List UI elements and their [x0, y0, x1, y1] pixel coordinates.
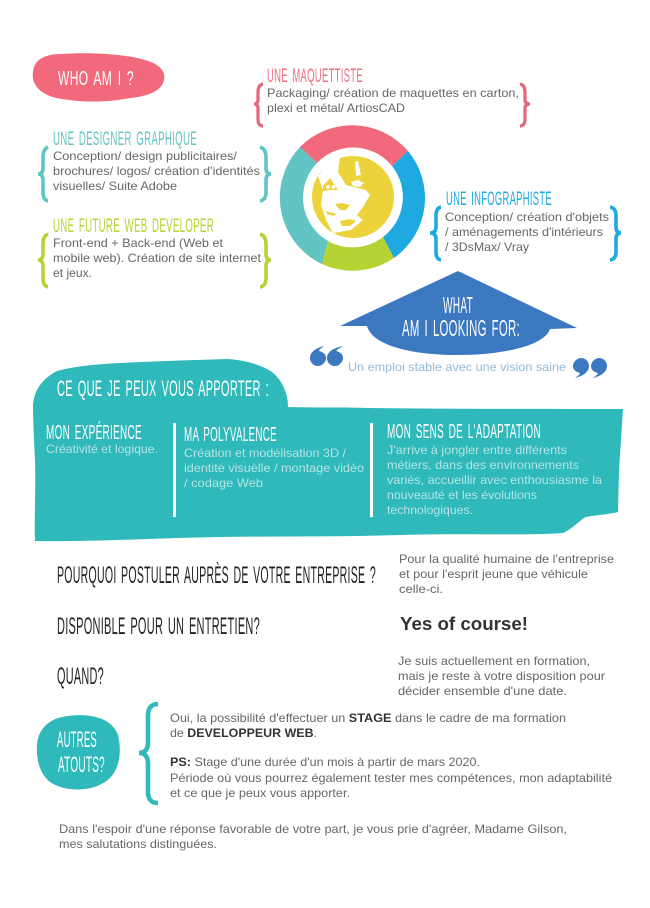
- text: quand answer: [398, 654, 605, 698]
- text: quand answer: décider ensemble d'une date.: [398, 684, 567, 698]
- panel: what am I looking for: WHAT: [443, 292, 473, 318]
- column: ma polyvalence: / codage Web: [184, 476, 263, 490]
- panel: une designer graphique: visuelles/ Suite Adobe: [53, 179, 177, 193]
- panel: une future web developer: et jeux.: [53, 266, 92, 280]
- panel: une designer graphique: UNE DESIGNER GRAPHIQUE: [53, 129, 197, 150]
- chart: profile ring with portrait: [280, 125, 425, 271]
- text: autres atouts details: PS: Stage d'une durée d'un mois à partir de mars 2020.: [170, 755, 480, 769]
- column: mon sens de l'adaptation: variés, accueillir avec enthousiasme la: [387, 473, 602, 487]
- panel: une future web developer: Front-end + Back-end (Web et: [53, 236, 224, 250]
- text: closing: [59, 822, 567, 851]
- text: autres atouts details: et ce que je peux vous apporter.: [170, 786, 350, 800]
- panel: une designer graphique: brochures/ logos/ création d'identités: [53, 164, 260, 178]
- ring segment: teal: [280, 147, 328, 264]
- panel: what am I looking for: AM I LOOKING FOR:: [402, 315, 520, 341]
- icon: large brace: [139, 704, 158, 803]
- column: ma polyvalence: MA POLYVALENCE: [184, 424, 277, 446]
- ring segment: green: [322, 237, 394, 271]
- panel: une maquettiste: [254, 66, 530, 126]
- icon: closing quotation marks: [573, 358, 607, 378]
- panel: une designer graphique: [38, 129, 271, 201]
- ring segment: pink: [300, 125, 408, 166]
- text: pourquoi answer: Pour la qualité humaine de l'entreprise: [399, 552, 614, 566]
- panel: une future web developer: UNE FUTURE WEB DEVELOPER: [53, 216, 214, 237]
- column: mon sens de l'adaptation: J'arrive à jongler entre différents: [387, 443, 567, 457]
- text: yes of course: Yes of course!: [400, 614, 528, 634]
- panel: une maquettiste: plexi et métal/ ArtiosCAD: [267, 101, 405, 115]
- text: DISPONIBLE POUR UN ENTRETIEN?: [57, 613, 260, 640]
- icon: portrait face: [312, 156, 394, 238]
- text: quand answer: mais je reste à votre disposition pour: [398, 669, 605, 683]
- panel: autres atouts badge: ATOUTS?: [58, 752, 105, 777]
- text: autres atouts details: de DEVELOPPEUR WEB .: [170, 726, 317, 740]
- panel: ce que je peux vous apporter: [33, 359, 623, 541]
- text: job sought: Un emploi stable avec une vision saine: [348, 360, 566, 374]
- column: mon expérience: MON EXPÉRIENCE: [46, 421, 142, 444]
- panel: une maquettiste: Packaging/ création de maquettes en carton,: [267, 86, 519, 100]
- panel: une infographiste: / 3DsMax/ Vray: [445, 240, 529, 254]
- column: mon sens de l'adaptation: [387, 421, 602, 517]
- text: QUAND?: [57, 663, 104, 690]
- column: mon sens de l'adaptation: métiers, dans des environnements: [387, 458, 579, 472]
- text: pourquoi answer: celle-ci.: [399, 582, 443, 596]
- panel: une infographiste: [430, 189, 621, 260]
- panel: what am I looking for: [340, 271, 577, 355]
- column: mon sens de l'adaptation: technologiques.: [387, 503, 473, 517]
- text: autres atouts details: [170, 711, 612, 800]
- panel: who am I badge: WHO AM I ?: [58, 68, 134, 90]
- text: autres atouts details: Période où vous pourrez également tester mes compétences, mon adaptabilité: [170, 771, 612, 785]
- column: mon expérience: Créativité et logique.: [46, 442, 158, 456]
- text: pourquoi answer: et pour l'esprit jeune que véhicule: [399, 567, 588, 581]
- panel: autres atouts badge: AUTRES: [57, 727, 97, 752]
- panel: une infographiste: / aménagements d'intérieurs: [445, 225, 603, 239]
- text: closing: mes salutations distinguées.: [59, 837, 217, 851]
- icon: opening quotation marks: [310, 346, 343, 366]
- panel: who am I badge: [33, 53, 164, 102]
- column: mon expérience: [46, 421, 158, 456]
- panel: une future web developer: mobile web). Création de site internet: [53, 251, 262, 265]
- column: ma polyvalence: identité visuèlle / montage vidéo: [184, 461, 364, 475]
- text: pourquoi answer: [399, 552, 614, 596]
- column: ma polyvalence: Création et modélisation 3D /: [184, 446, 347, 460]
- text: closing: Dans l'espoir d'une réponse favorable de votre part, je vous prie d'agréer, Madame Gilson,: [59, 822, 567, 836]
- panel: une future web developer: [38, 216, 271, 287]
- panel: ce que je peux vous apporter: CE QUE JE PEUX VOUS APPORTER :: [57, 376, 269, 401]
- panel: une maquettiste: UNE MAQUETTISTE: [267, 66, 363, 87]
- panel: une designer graphique: Conception/ design publicitaires/: [53, 149, 238, 163]
- panel: une infographiste: Conception/ création d'objets: [445, 210, 609, 224]
- panel: autres atouts badge: [37, 715, 120, 790]
- column: ma polyvalence: [184, 424, 364, 490]
- text: autres atouts details: Oui, la possibilité d'effectuer un STAGE dans le cadre de ma formation: [170, 711, 566, 725]
- column: mon sens de l'adaptation: nouveauté et les évolutions: [387, 488, 537, 502]
- text: quand answer: Je suis actuellement en formation,: [398, 654, 590, 668]
- ring segment: blue: [383, 151, 425, 258]
